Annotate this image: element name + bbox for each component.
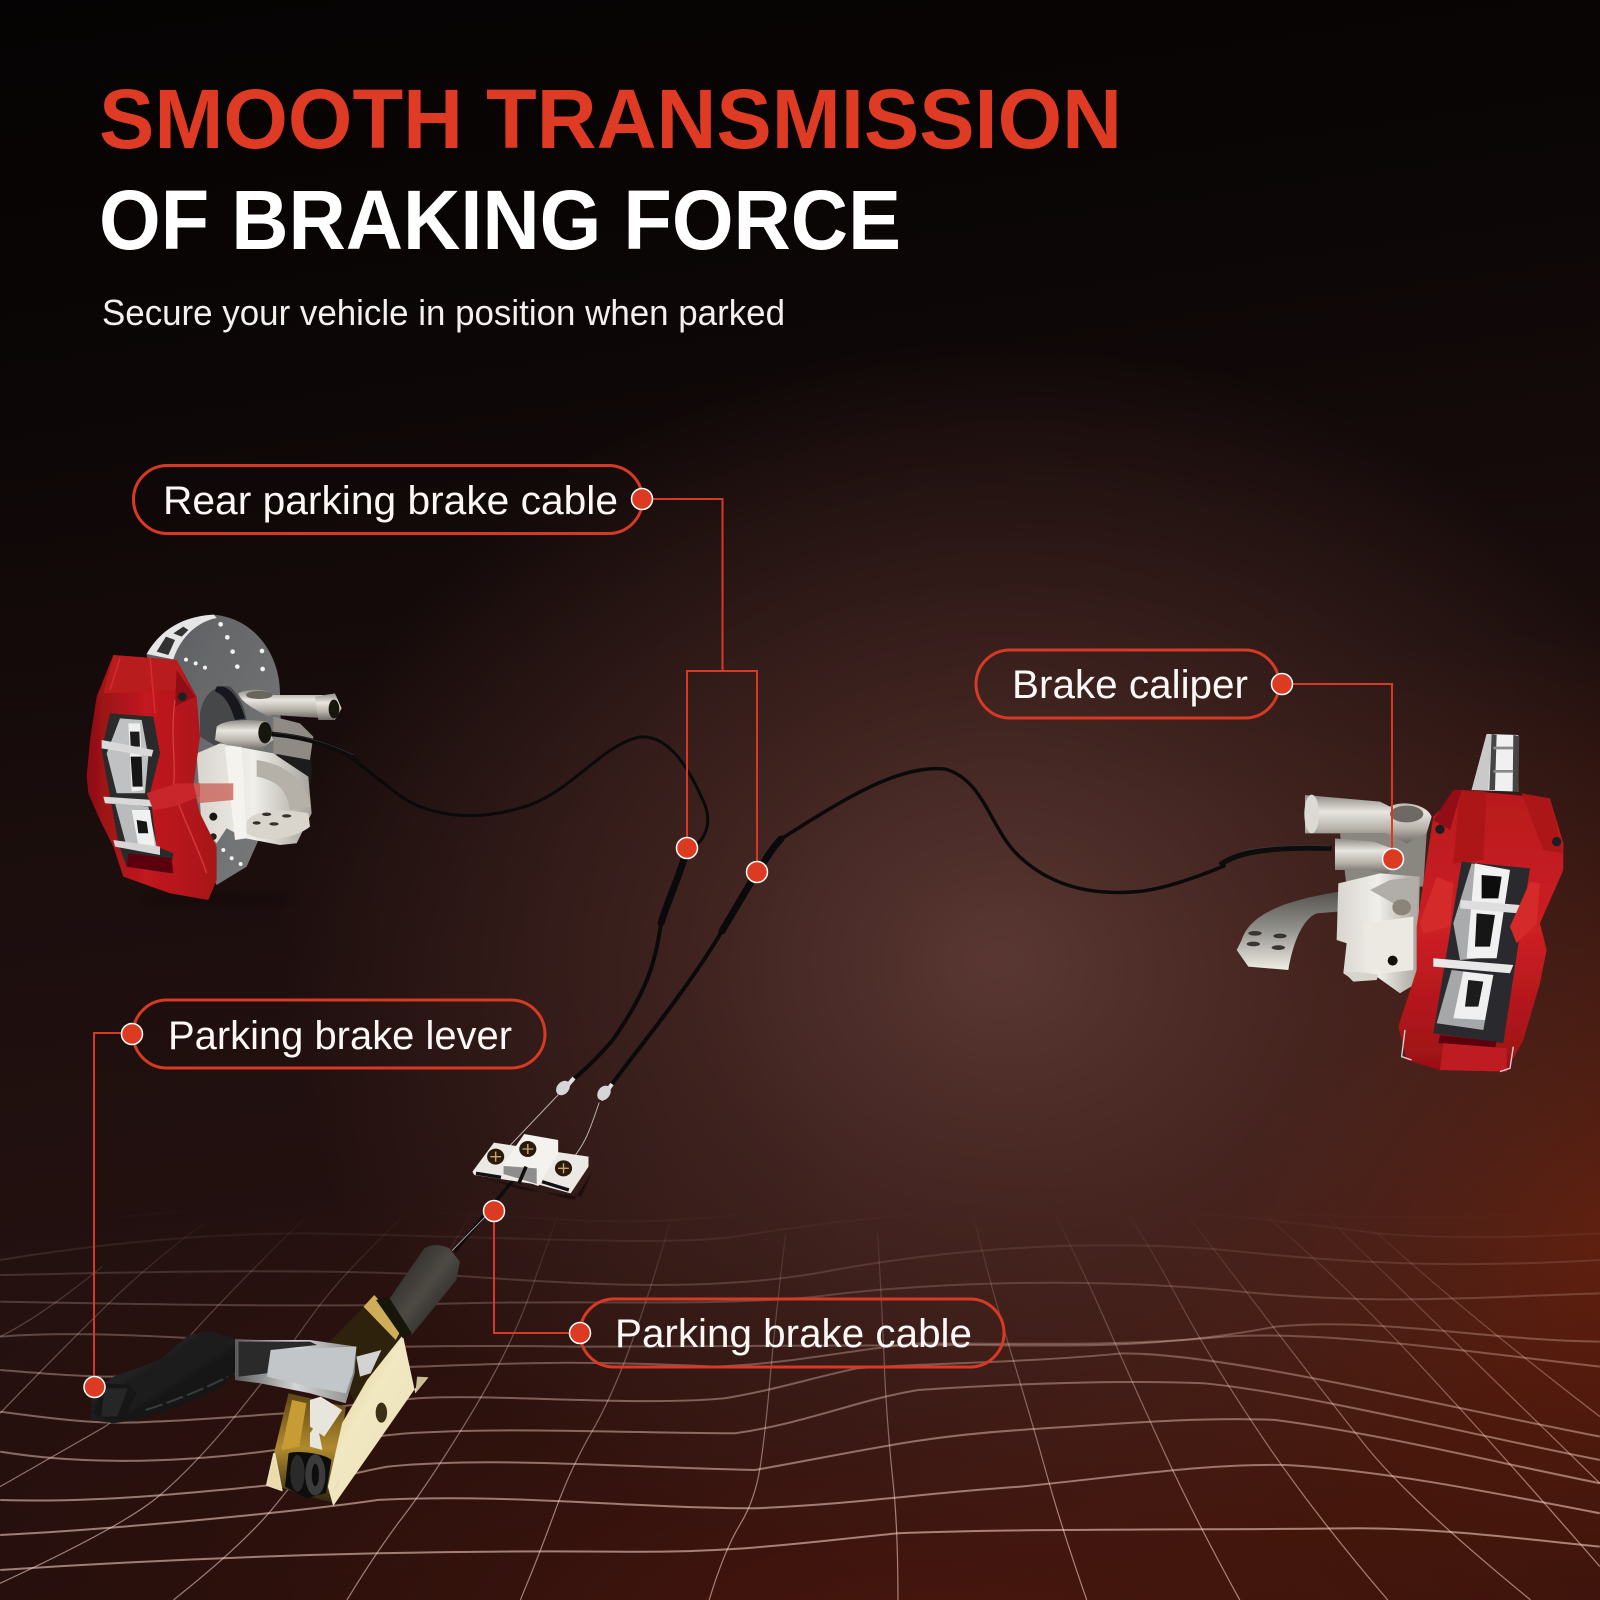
cable end fitting: right bbox=[594, 1083, 614, 1103]
title: SMOOTH TRANSMISSION bbox=[99, 72, 1122, 166]
callout: brake caliper bbox=[976, 650, 1292, 718]
cable clamp bracket bbox=[472, 1134, 592, 1200]
leader: parking brake cable bbox=[494, 1210, 580, 1333]
callout: parking brake cable: Parking brake cable bbox=[615, 1312, 972, 1356]
left brake assembly bbox=[87, 615, 360, 907]
callout: parking brake cable bbox=[570, 1299, 1004, 1367]
leader: brake caliper bbox=[1282, 684, 1392, 860]
cable end fitting: left bbox=[553, 1078, 574, 1098]
callout: rear parking brake cable bbox=[134, 466, 652, 534]
parking brake lever bbox=[90, 1167, 524, 1506]
title bbox=[99, 72, 1122, 267]
subtitle: Secure your vehicle in position when parked bbox=[102, 292, 785, 333]
right brake assembly bbox=[1220, 734, 1563, 1072]
marker dots on components bbox=[84, 838, 1404, 1398]
callout: brake caliper: Brake caliper bbox=[1012, 663, 1248, 707]
leader: parking brake lever bbox=[94, 1033, 132, 1387]
callout: parking brake lever: Parking brake lever bbox=[168, 1014, 512, 1058]
perspective grid floor bbox=[0, 1193, 1600, 1600]
callout: parking brake lever bbox=[122, 1000, 545, 1068]
leader: rear parking brake cable bbox=[642, 499, 757, 872]
callout: rear parking brake cable: Rear parking brake cable bbox=[163, 479, 618, 523]
cable: right rear brake cable bbox=[569, 769, 1224, 1163]
cable: left rear brake cable bbox=[355, 737, 708, 1155]
title: OF BRAKING FORCE bbox=[99, 173, 901, 267]
